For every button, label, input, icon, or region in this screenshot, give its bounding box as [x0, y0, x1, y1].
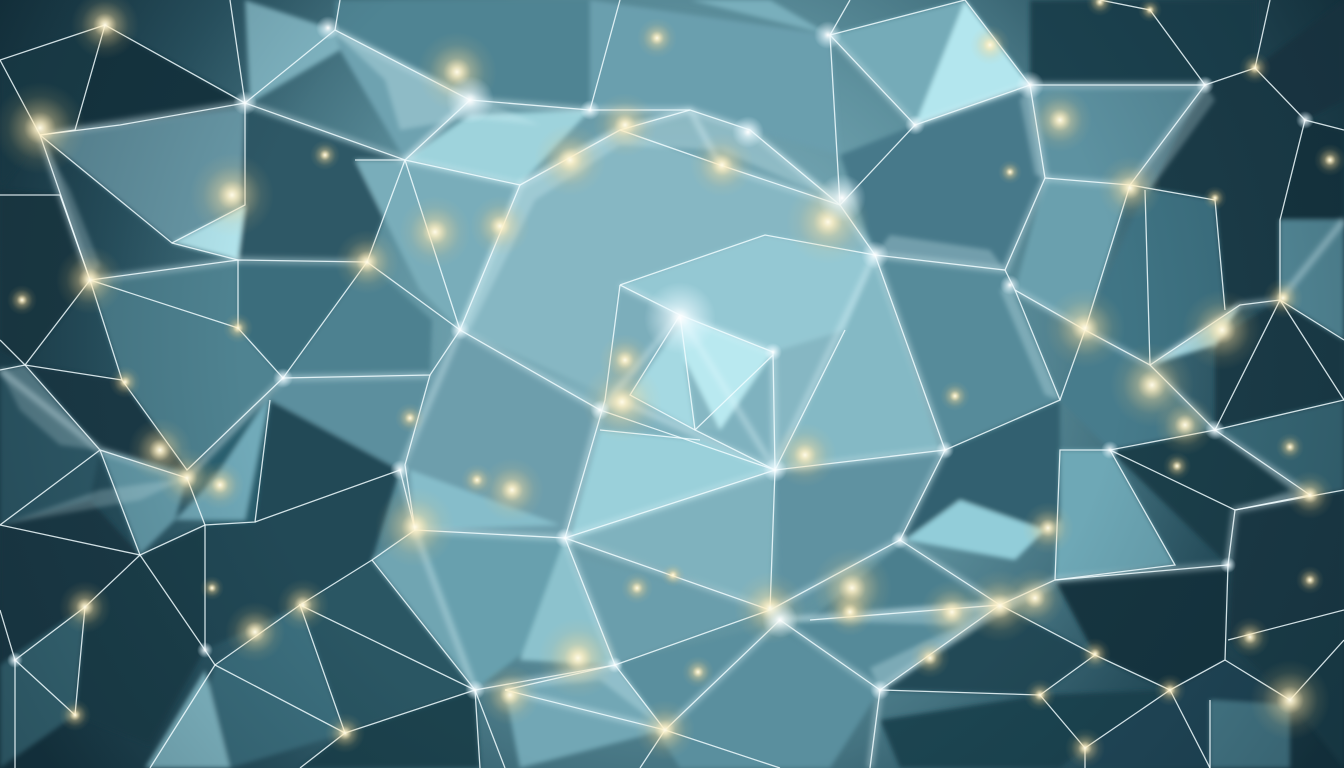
dark outer cells	[0, 25, 105, 190]
upper middle cells	[335, 30, 470, 160]
central light cells	[460, 130, 875, 470]
